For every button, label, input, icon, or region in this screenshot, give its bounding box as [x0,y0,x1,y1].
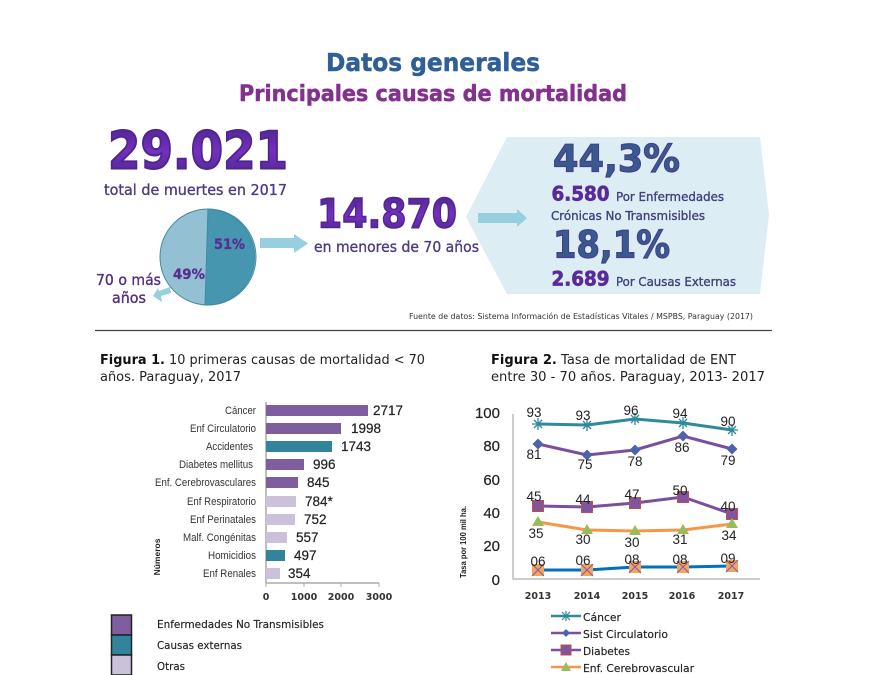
series: fifth blue series [532,560,738,576]
y axis labels: 20 [483,538,500,555]
text: Crónicas No Transmisibles: Crónicas No Transmisibles [551,208,705,223]
text: Por Causas Externas: Por Causas Externas [616,274,736,289]
category labels: Enf Renales [203,568,256,580]
title [239,48,627,107]
value labels: 557 [296,530,319,545]
bars [266,405,368,579]
series: Cáncer [532,413,738,436]
data labels: 94 [672,406,688,421]
panel: breakdown hexagon [466,137,769,294]
heading: Figura 2: Figura 2. Tasa de mortalidad de ENT [491,352,737,368]
legend: line chart [551,611,695,675]
heading: Figura 1 [100,352,425,385]
y axis labels: 60 [483,472,500,489]
data labels: 40 [720,499,736,514]
category labels: Enf Perinatales [190,514,256,526]
category labels: Enf Circulatorio [190,423,256,435]
subheading: Principales causas de mortalidad: Principales causas de mortalidad [239,82,627,107]
x axis labels: 2015 [622,591,648,602]
data labels: 44 [575,492,591,507]
category labels: Enf Respiratorio [187,496,256,508]
caption: total de muertes: total de muertes en 2017 [104,181,287,199]
y axis labels: 80 [483,438,500,455]
heading: Figura 1: años. Paraguay, 2017 [100,369,241,385]
x axis labels: 2013 [525,591,551,602]
value labels: 497 [294,548,317,563]
callout: 70 o más años: 70 o más [96,271,161,289]
legend: bar chart [112,615,324,675]
stat: 44,3%: 44,3% [553,138,680,180]
stat: 6.580: 6.580 [552,182,610,206]
text: Por Enfermedades: Por Enfermedades [616,189,724,204]
x axis labels: 3000 [366,592,393,603]
data labels: 08 [672,552,688,567]
bar chart: 10 causes [152,402,403,603]
data labels: 31 [672,532,688,547]
data labels: 35 [528,526,544,541]
data labels: 09 [720,551,736,566]
category labels: Homicidios [208,550,256,562]
pie label: 51%: 51% [214,237,245,253]
pie label: 49%: 49% [173,267,205,283]
data labels: 78 [627,454,643,469]
data labels: 34 [721,528,737,543]
callout: 70 o más años: años [112,289,146,307]
x axis labels: 2016 [669,591,696,602]
pie chart: age split [160,209,256,305]
value labels: 996 [313,457,336,472]
source note: Fuente de datos: Sistema Información de Estadísticas Vitales / MSPBS, Paraguay (2017) [409,311,753,321]
category labels: Enf. Cerebrovasculares [155,477,256,489]
value labels [288,403,403,581]
panel: under 70 deaths [314,192,479,256]
caption: en menores de 70 años: en menores de 70 años [314,238,479,256]
heading: Figura 2: entre 30 - 70 años. Paraguay, 2013- 2017 [491,369,765,385]
heading: Figura 2 [491,352,765,385]
data labels: 30 [575,532,591,547]
legend item: Enf. Cerebrovascular [551,662,695,675]
data labels: 06 [530,554,546,569]
legend item: Cáncer [551,611,622,624]
data labels: 93 [526,405,542,420]
data labels: 50 [672,483,688,498]
y axis title: Números [152,538,162,575]
series: Enf. Cerebrovascular [532,516,738,535]
category labels: Cáncer [225,405,256,417]
data labels: 06 [575,553,591,568]
x axis labels [525,591,744,602]
series: Sist Circulatorio [532,430,738,460]
legend: bar chart: Causas externas [157,640,242,652]
stat: 29.021: 29.021 [108,122,288,182]
x axis labels: 1000 [291,592,318,603]
category labels: Diabetes mellitus [179,459,253,471]
value labels: 845 [307,475,330,490]
legend: bar chart: Enfermedades No Transmisibles [157,619,324,631]
legend item: Diabetes: Diabetes [583,646,630,658]
value labels: 2717 [373,403,403,418]
legend item: Enf. Cerebrovascular: Enf. Cerebrovascular [583,663,695,675]
category labels: Malf. Congénitas [183,532,256,544]
y axis title: Tasa por 100 mil ha. [458,506,468,578]
value labels: 1998 [351,421,381,436]
legend item: Diabetes [551,645,630,658]
data labels: 30 [624,535,640,550]
legend item: Sist Circulatorio: Sist Circulatorio [583,629,668,641]
legend: bar chart: Otras [157,661,185,673]
x axis labels [263,592,393,603]
data labels: 96 [623,403,639,418]
stat: 14.870: 14.870 [317,192,457,238]
x axis labels: 2000 [328,592,355,603]
line chart: ENT mortality rate [458,403,760,602]
data labels: 75 [577,457,593,472]
x axis labels: 0 [263,592,270,603]
data labels: 08 [624,552,640,567]
data labels: 86 [674,440,690,455]
data labels: 90 [720,414,736,429]
legend item: Cáncer: Cáncer [583,612,622,624]
x axis labels: 2014 [574,591,601,602]
data labels: 47 [624,487,640,502]
panel: total deaths [104,122,288,199]
x axis labels: 2017 [718,591,744,602]
heading: Figura 1: Figura 1. 10 primeras causas de mortalidad < 70 [100,352,425,368]
data labels: 81 [526,447,542,462]
heading: Datos generales: Datos generales [326,48,540,77]
value labels: 354 [288,566,311,581]
category labels: Accidentes [206,441,253,453]
y axis labels [475,405,500,589]
stat: 18,1%: 18,1% [553,224,670,266]
data labels: 45 [526,489,542,504]
data labels [526,403,737,569]
value labels: 784* [305,494,334,509]
arrow: to 14.870 [260,234,308,253]
value labels: 752 [304,512,327,527]
category labels [155,405,256,580]
arrow: to 70 o más años [153,287,171,302]
data labels: 79 [720,453,736,468]
y axis labels: 0 [492,572,500,589]
series: Diabetes [532,492,738,520]
stat: 2.689: 2.689 [552,268,610,290]
y axis labels: 40 [483,505,500,522]
value labels: 1743 [341,439,371,454]
arrow: to breakdown [478,209,527,227]
y axis labels: 100 [475,405,500,422]
data labels: 93 [575,408,591,423]
callout: 70 o más años [96,271,161,307]
